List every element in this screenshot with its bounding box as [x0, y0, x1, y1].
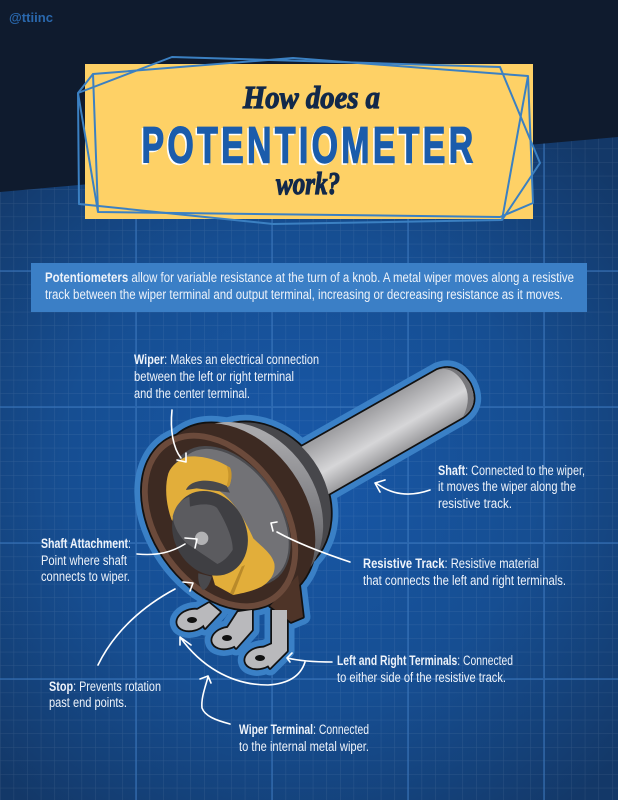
label: shaft: resistive track.: [438, 496, 512, 512]
label: shaft attachment: [41, 536, 131, 585]
arrow: wiper terminal: [200, 676, 230, 724]
label: stop: [49, 679, 161, 711]
title: work: work?: [276, 165, 340, 201]
label: shaft attachment: Point where shaft: [41, 553, 127, 569]
title panel: [78, 57, 540, 224]
title: potentiometer: [140, 116, 476, 175]
label: wiper: Wiper: Makes an electrical connection: [134, 352, 319, 368]
wiper blade: [173, 497, 233, 564]
label: resistive track: that connects the left and right terminals.: [363, 573, 566, 589]
label: left and right terminals: Left and Right Terminals: Connected: [337, 653, 513, 669]
label: shaft: it moves the wiper along the: [438, 479, 576, 495]
arrow: left and right terminals: [287, 653, 332, 662]
arrow: wiper: [171, 410, 186, 462]
label: stop: past end points.: [49, 695, 127, 711]
title: how does a: How does a: [242, 79, 380, 115]
potentiometer illustration: [109, 368, 474, 672]
label: resistive track: Resistive Track: Resistive material: [363, 556, 539, 572]
arrow: terminals arc: [180, 637, 305, 685]
geometric frame: [78, 57, 540, 224]
arrow: shaft: [375, 480, 430, 494]
label: wiper terminal: Wiper Terminal: Connected: [239, 722, 369, 738]
label: shaft attachment: connects to wiper.: [41, 569, 130, 585]
arrow: resistive track: [271, 522, 350, 562]
shaft: [301, 368, 474, 495]
hub shadow: [186, 481, 230, 493]
label: wiper terminal: to the internal metal wiper.: [239, 739, 369, 755]
label: shaft attachment: Shaft Attachment:: [41, 536, 131, 552]
label: wiper: between the left or right terminal: [134, 369, 294, 385]
label: left and right terminals: to either side of the resistive track.: [337, 670, 506, 686]
inner disc: [144, 423, 316, 609]
label: wiper: and the center terminal.: [134, 386, 250, 402]
label: shaft: [438, 463, 585, 512]
stop tab: [198, 573, 212, 590]
intro panel: [31, 263, 587, 312]
lower track sliver: [230, 565, 245, 595]
handle: @ttiinc: [9, 10, 53, 25]
label: resistive track: [363, 556, 566, 589]
label: shaft: Shaft: Connected to the wiper,: [438, 463, 585, 479]
arrow: stop: [98, 582, 193, 665]
label: wiper terminal: [239, 722, 369, 755]
label: left and right terminals: [337, 653, 513, 686]
terminals: [175, 603, 287, 672]
label: wiper: [134, 352, 319, 402]
label: stop: Stop: Prevents rotation: [49, 679, 161, 695]
flange: [155, 394, 361, 606]
front housing: [109, 403, 331, 639]
arrow: shaft attachment: [137, 538, 197, 555]
mounting bracket: [270, 575, 303, 622]
shaft pin: [195, 532, 208, 545]
wiper knob: [158, 478, 262, 589]
arrows: [98, 410, 430, 724]
resistive track: [166, 456, 275, 595]
